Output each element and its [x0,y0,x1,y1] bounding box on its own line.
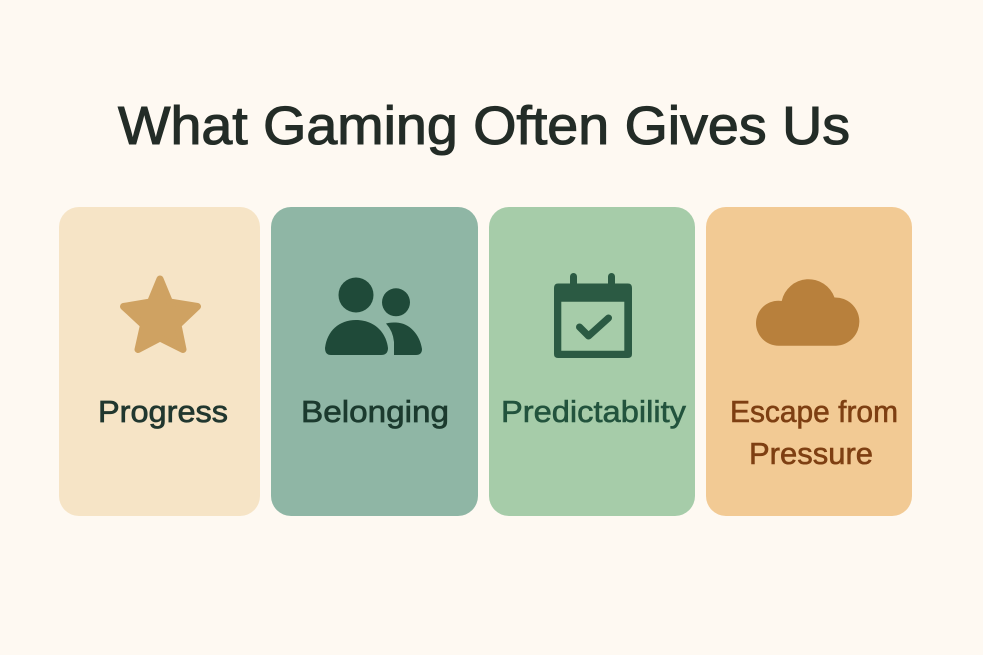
panel: escape from pressure [706,207,912,516]
icon: cloud [756,279,859,346]
title: What Gaming Often Gives Us [118,96,850,156]
panel: belonging [271,207,478,516]
label: Predictability: Predictability [501,394,687,429]
icon: star [124,279,198,350]
panel: predictability [489,207,695,516]
label: Escape from Pressure: Escape from [730,394,898,429]
icon: calendar check [554,273,632,358]
label: Escape from Pressure [730,394,898,471]
panel: progress [59,207,260,516]
icon: people [325,278,422,355]
label: Progress: Progress [98,394,228,429]
label: Belonging: Belonging [301,394,449,429]
label: Escape from Pressure: Pressure [749,436,873,471]
